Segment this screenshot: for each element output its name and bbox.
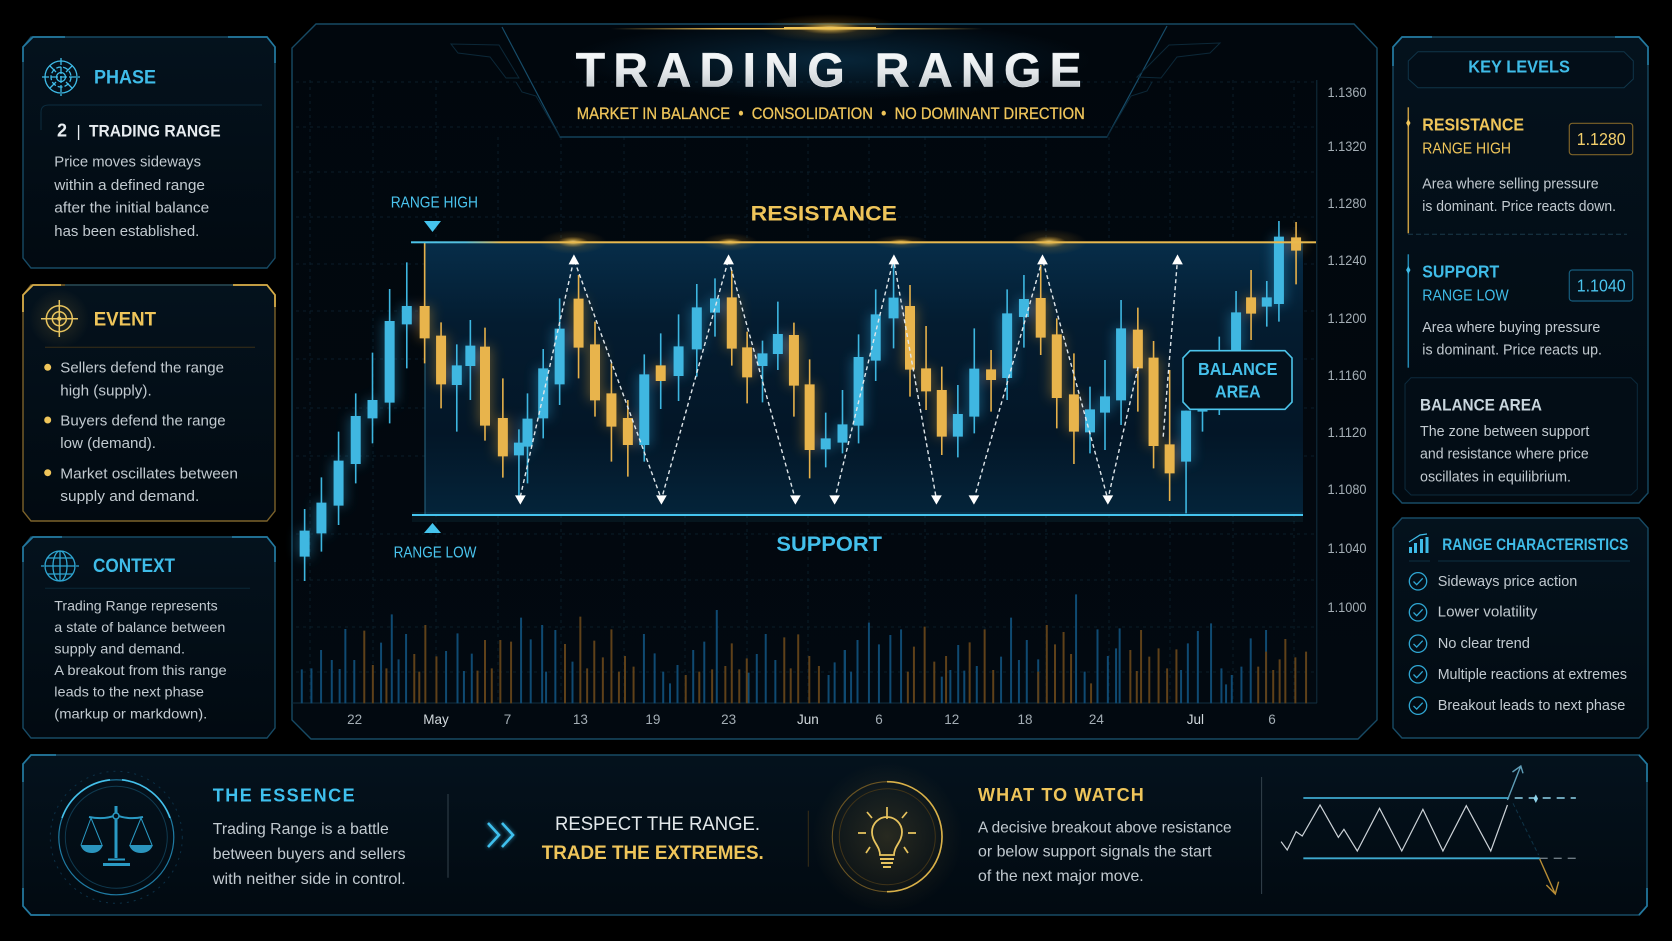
resistance level: is dominant. Price reacts down.	[1422, 198, 1616, 215]
event bullets: high (supply).	[60, 382, 152, 399]
subtitle: MARKET IN BALANCE • CONSOLIDATION • NO DOMINANT DIRECTION	[577, 105, 1085, 123]
event bullets	[44, 360, 238, 505]
checklist: Breakout leads to next phase	[1438, 697, 1625, 714]
the essence: between buyers and sellers	[213, 846, 406, 863]
support level: 1.1040	[1577, 276, 1626, 296]
phase description: within a defined range	[53, 177, 205, 194]
date axis: 22	[347, 712, 362, 727]
date axis: 18	[1017, 712, 1033, 727]
event bullets: low (demand).	[60, 435, 156, 452]
heading: key levels: KEY LEVELS	[1468, 57, 1570, 77]
resistance level	[1406, 107, 1633, 234]
context description: Trading Range represents	[54, 598, 218, 614]
price axis: 1.1040	[1328, 541, 1366, 556]
phase description	[53, 154, 209, 240]
icon: rising bars	[1409, 534, 1428, 553]
phase name: |	[76, 124, 81, 141]
price axis: 1.1120	[1328, 425, 1366, 440]
balance area card: BALANCE AREA	[1420, 396, 1542, 415]
checklist: Sideways price action	[1438, 573, 1577, 590]
balance area shading	[425, 243, 1303, 515]
balance area card: oscillates in equilibrium.	[1420, 469, 1571, 486]
support level	[1406, 254, 1633, 368]
date axis: 7	[504, 712, 511, 727]
panel: bottom strip	[23, 755, 1647, 915]
resistance level: 1.1280	[1577, 129, 1626, 149]
checklist: No clear trend	[1438, 635, 1530, 652]
title: TRADING RANGE	[576, 45, 1082, 98]
panel: phase	[23, 37, 275, 268]
date axis	[347, 712, 1276, 727]
what to watch	[978, 785, 1232, 885]
phase name: 2	[57, 121, 67, 141]
context description: A breakout from this range	[54, 662, 227, 678]
price axis: 1.1160	[1328, 368, 1366, 383]
date axis: 23	[721, 712, 736, 727]
support label: SUPPORT	[776, 532, 882, 556]
heading: context: CONTEXT	[93, 556, 175, 577]
panel: main chart	[292, 14, 1377, 739]
balance area callout: AREA	[1215, 381, 1261, 401]
context description: a state of balance between	[54, 619, 225, 635]
icon: chevrons	[488, 823, 513, 847]
the essence: THE ESSENCE	[213, 786, 355, 806]
event bullets: supply and demand.	[60, 488, 199, 505]
price axis: 1.1360	[1328, 85, 1366, 100]
icon: light bulb	[812, 762, 962, 912]
icon: event crosshair	[29, 289, 89, 349]
heading: range characteristics: RANGE CHARACTERISTICS	[1442, 536, 1628, 554]
heading: key levels	[1408, 52, 1633, 88]
balance area card: and resistance where price	[1420, 446, 1589, 463]
breakout mini chart	[1281, 766, 1576, 894]
date axis: 19	[645, 712, 660, 727]
price axis: 1.1200	[1328, 311, 1366, 326]
heading: event: EVENT	[94, 308, 156, 330]
checklist: Multiple reactions at extremes	[1438, 666, 1627, 683]
what to watch: of the next major move.	[978, 868, 1144, 885]
date axis: Jul	[1187, 712, 1204, 727]
title glow	[570, 14, 1090, 100]
range high label	[391, 194, 478, 232]
resistance level: Area where selling pressure	[1422, 175, 1599, 192]
date axis: Jun	[797, 712, 819, 727]
support level: is dominant. Price reacts up.	[1422, 342, 1602, 359]
event bullets: Sellers defend the range	[60, 360, 224, 377]
panel: key levels	[1393, 37, 1648, 503]
price axis: 1.1080	[1328, 482, 1366, 497]
price axis	[1328, 85, 1366, 615]
range high label: RANGE HIGH	[391, 194, 478, 211]
checklist	[1409, 573, 1627, 714]
swing arrows	[515, 254, 1183, 505]
takeaway: TRADE THE EXTREMES.	[542, 842, 764, 864]
checklist: Lower volatility	[1438, 604, 1538, 621]
candlesticks: part one	[305, 242, 842, 581]
date axis: 6	[875, 712, 883, 727]
price axis: 1.1240	[1328, 253, 1366, 268]
context description	[54, 598, 227, 721]
support level: Area where buying pressure	[1422, 319, 1600, 336]
balance area card	[1405, 378, 1637, 495]
context description: (markup or markdown).	[54, 705, 207, 721]
takeaway	[542, 813, 764, 864]
chart grid	[296, 80, 1317, 703]
date axis: May	[423, 712, 449, 727]
price axis: 1.1000	[1328, 600, 1366, 615]
what to watch: WHAT TO WATCH	[978, 785, 1144, 805]
event bullets: Buyers defend the range	[60, 412, 226, 429]
phase name	[57, 121, 221, 141]
candle glow	[305, 237, 1296, 557]
the essence: Trading Range is a battle	[213, 821, 389, 838]
what to watch: or below support signals the start	[978, 844, 1212, 861]
context description: leads to the next phase	[54, 684, 204, 700]
resistance label: RESISTANCE	[751, 202, 897, 226]
balance area card: The zone between support	[1420, 423, 1590, 440]
phase description: after the initial balance	[54, 200, 209, 217]
price axis: 1.1320	[1328, 139, 1366, 154]
balance area callout	[1183, 351, 1292, 409]
the essence: with neither side in control.	[212, 871, 406, 888]
what to watch: A decisive breakout above resistance	[978, 819, 1232, 836]
takeaway: RESPECT THE RANGE.	[555, 813, 760, 835]
title plate	[451, 26, 1220, 137]
panel: context	[23, 537, 275, 738]
phase description: Price moves sideways	[54, 154, 201, 171]
price axis: 1.1280	[1328, 196, 1366, 211]
support level: SUPPORT	[1422, 262, 1500, 282]
volume bars	[302, 594, 1306, 703]
heading: phase: PHASE	[94, 66, 156, 88]
context description: supply and demand.	[54, 640, 185, 656]
balance area callout: BALANCE	[1198, 359, 1278, 379]
support level: RANGE LOW	[1422, 287, 1509, 304]
resistance level: RESISTANCE	[1422, 115, 1524, 135]
panel: event	[23, 285, 275, 521]
range low label: RANGE LOW	[394, 545, 477, 562]
support line	[412, 512, 1303, 522]
range low label	[394, 523, 477, 562]
the essence	[212, 786, 406, 888]
icon: globe	[41, 551, 79, 581]
phase description: has been established.	[54, 223, 199, 240]
date axis: 6	[1268, 712, 1276, 727]
event bullets: Market oscillates between	[60, 465, 238, 482]
icon: balance scale	[50, 771, 182, 903]
inner card	[41, 105, 262, 130]
phase name: TRADING RANGE	[89, 123, 221, 141]
date axis: 24	[1089, 712, 1104, 727]
resistance line	[411, 229, 1316, 255]
date axis: 12	[944, 712, 959, 727]
resistance level: RANGE HIGH	[1422, 140, 1511, 157]
date axis: 13	[573, 712, 588, 727]
panel: range characteristics	[1393, 518, 1648, 738]
icon: phase target	[42, 58, 80, 96]
candlesticks: part two	[859, 221, 1296, 513]
